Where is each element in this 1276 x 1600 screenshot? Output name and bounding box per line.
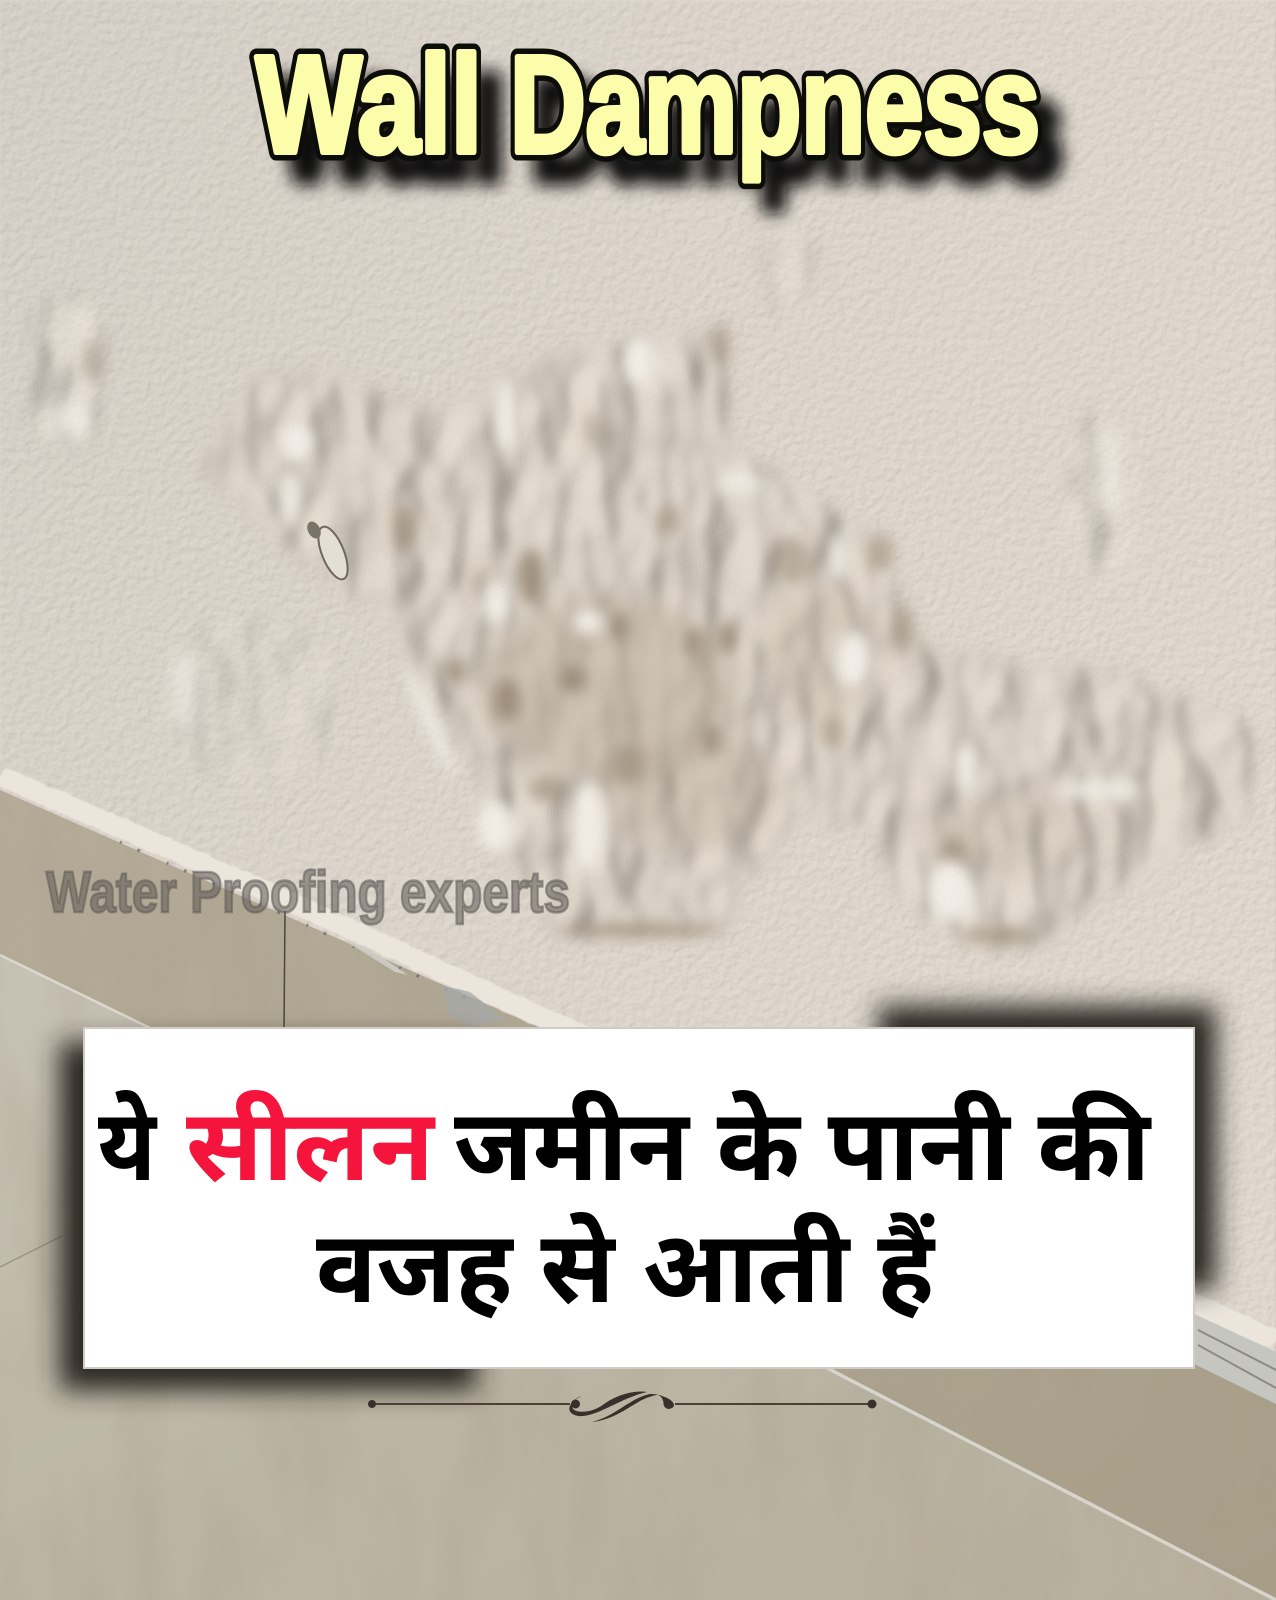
grey mortar smear bbox=[441, 985, 506, 1026]
vertical tile joint bbox=[284, 911, 285, 1030]
white plaster edge bbox=[0, 776, 1276, 1340]
watermark: Water Proofing experts bbox=[46, 860, 570, 925]
grey plaster streaks, right bbox=[1190, 1312, 1276, 1404]
floor and skirting bbox=[0, 776, 1276, 1600]
title outline: Wall bbox=[256, 28, 482, 182]
damp patch: broad darker staining bbox=[480, 580, 1100, 875]
ornamental divider bbox=[368, 1392, 876, 1422]
callout shadows bbox=[60, 1006, 1216, 1390]
damp patch: raised highlights bbox=[50, 335, 1144, 921]
damp patch: darker dimples bbox=[85, 322, 1038, 942]
title shadow: Dampness bbox=[532, 54, 1062, 208]
title outline bbox=[256, 28, 1040, 182]
title fill: Wall bbox=[256, 28, 482, 182]
icon: plaster flake on wall bbox=[304, 519, 354, 583]
damp patch: blister relief bbox=[26, 246, 1256, 954]
floor tile, lower left bbox=[0, 955, 1276, 1600]
title shadow bbox=[278, 54, 1062, 208]
callout text line 2: वजह से आती हैं bbox=[316, 1212, 936, 1324]
callout text line 1: जमीन के पानी की bbox=[454, 1090, 1152, 1202]
plaster chips bbox=[120, 842, 470, 1000]
title outline: Dampness bbox=[510, 28, 1040, 182]
callout text line 1 bbox=[98, 1090, 1152, 1202]
floor tile joint bbox=[827, 1368, 1276, 1600]
skirting band bbox=[0, 790, 1276, 1600]
title fill bbox=[256, 28, 1040, 182]
callout text line 1: ये bbox=[98, 1090, 157, 1202]
floor crack bbox=[0, 1236, 62, 1267]
title fill: Dampness bbox=[510, 28, 1040, 182]
callout text line 1: सीलन bbox=[186, 1090, 436, 1202]
title shadow: Wall bbox=[278, 54, 504, 208]
callout: white panel bbox=[84, 1028, 1194, 1368]
title bbox=[256, 28, 1062, 208]
damp patch: base tone bbox=[197, 335, 1266, 950]
floor texture bbox=[36, 1152, 48, 1290]
